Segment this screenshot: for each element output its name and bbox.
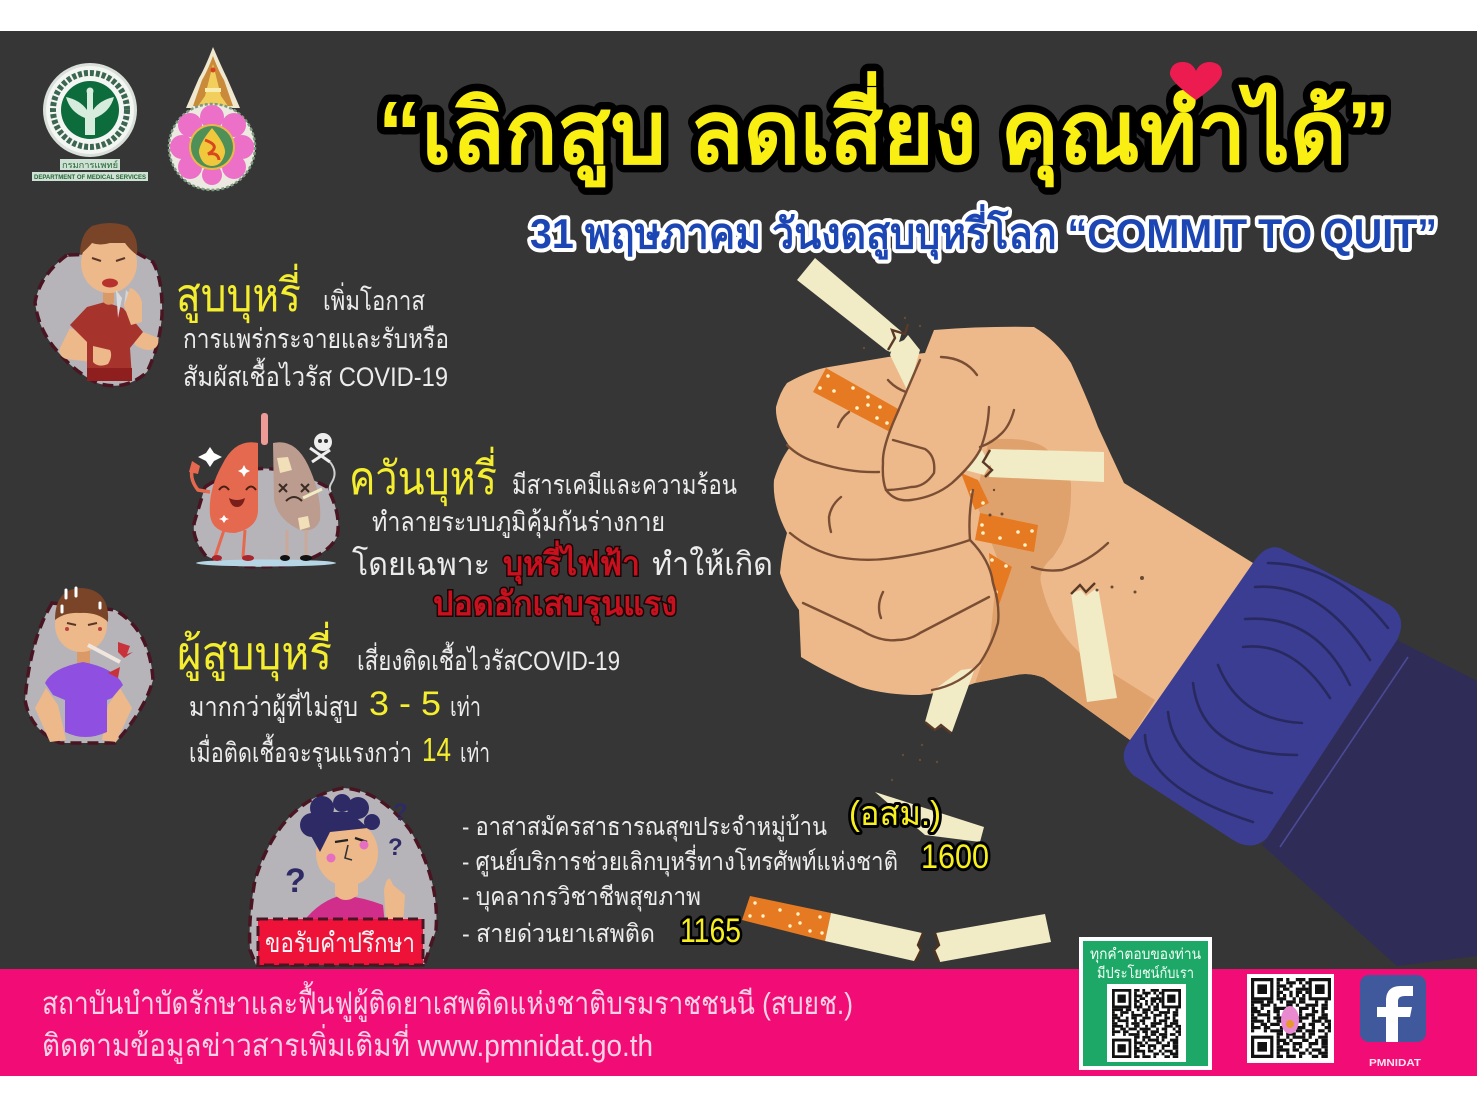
text block: smoking <box>176 263 449 392</box>
blue jacket cuff with fold lines <box>1124 547 1401 846</box>
illustration: thinking person <box>250 788 436 965</box>
text block: cigarette smoke: มีสารเคมีและความร้อน <box>512 470 737 500</box>
dark blue forearm sleeve <box>1262 640 1477 966</box>
consultation contact list: - สายด่วนยาเสพติด <box>462 920 655 948</box>
logo: Department of Medical Services: DEPARTMENT OF MEDICAL SERVICES <box>34 174 147 181</box>
text block: cigarette smoke: ปอดอักเสบรุนแรง <box>433 585 677 625</box>
tobacco crumbs <box>863 317 1144 781</box>
label: request consultation <box>258 919 423 965</box>
icon: heart <box>1170 62 1222 100</box>
text block: cigarette smoke: บุหรี่ไฟฟ้า <box>503 540 640 585</box>
illustration: thinking person: ? <box>388 834 403 861</box>
icon: Facebook <box>1360 975 1426 1069</box>
text block: smokers risk: 14 <box>422 731 451 768</box>
text block: smokers risk: มากกว่าผู้ที่ไม่สูบ <box>189 688 358 723</box>
footer band <box>0 969 1477 1076</box>
text block: smoking: เพิ่มโอกาส <box>323 282 425 316</box>
text block: smoking: สูบบุหรี่ <box>176 263 301 324</box>
survey QR card: มีประโยชน์กับเรา <box>1097 964 1194 982</box>
icon: Facebook: PMNIDAT <box>1369 1057 1422 1069</box>
survey QR card <box>1079 937 1212 1070</box>
broken cigarette pieces <box>797 258 1117 732</box>
consultation contact list: (อสม.) <box>849 795 941 833</box>
text block: smokers risk: เท่า <box>450 692 481 722</box>
consultation contact list: - อาสาสมัครสาธารณสุขประจำหมู่บ้าน <box>462 813 827 842</box>
logo: Department of Medical Services: กรมการแพทย์ <box>62 159 118 170</box>
text block: cigarette smoke: ทำลายระบบภูมิคุ้มกันร่างกาย <box>372 507 665 539</box>
text block: smokers risk <box>177 621 620 770</box>
text block: smoking: สัมผัสเชื้อไวรัส COVID-19 <box>183 357 448 392</box>
text block: smokers risk: เสี่ยงติดเชื้อไวรัสCOVID-19 <box>357 641 620 676</box>
orange filter pieces behind the thumb <box>813 368 1038 608</box>
illustration: thinking person: ? <box>393 799 408 826</box>
illustration: coughing man <box>35 223 162 386</box>
text block: smokers risk: เท่า <box>460 738 490 768</box>
jagged burnt edges <box>888 324 1095 733</box>
consultation contact list: 1600 <box>921 838 989 876</box>
text block: smokers risk: ผู้สูบบุหรี่ <box>177 621 332 682</box>
palm shadow <box>975 439 1155 740</box>
logo: Department of Medical Services <box>32 63 148 181</box>
label: request consultation: ขอรับคำปรึกษา <box>265 928 415 958</box>
text block: cigarette smoke: ควันบุหรี่ <box>349 446 497 507</box>
filter dots <box>818 374 1034 594</box>
footer text <box>42 981 853 1064</box>
illustration: fist crushing cigarettes <box>774 258 1253 781</box>
broken cigarette near hotline number <box>742 896 1051 962</box>
text block: cigarette smoke <box>349 446 773 625</box>
website QR code <box>1247 974 1334 1063</box>
text block: smokers risk: 3 - 5 <box>369 685 441 723</box>
illustration: healthy and smoker lungs <box>189 413 338 567</box>
text block: cigarette smoke: ทำให้เกิด <box>652 546 773 582</box>
survey QR card: ทุกคำตอบของท่าน <box>1090 946 1201 964</box>
subtitle: 31 พฤษภาคม วันงดสูบบุหรี่โลก “COMMIT TO QUIT” <box>530 204 1437 260</box>
illustration: thinking person: ? <box>285 862 306 900</box>
consultation contact list: - ศูนย์บริการช่วยเลิกบุหรี่ทางโทรศัพท์แห่งชาติ <box>462 844 898 877</box>
footer text: สถาบันบำบัดรักษาและฟื้นฟูผู้ติดยาเสพติดแห่งชาติบรมราชชนนี (สบยช.) <box>42 981 853 1022</box>
illustration: man with fever and thermometer <box>25 588 153 743</box>
title: “เลิกสูบ ลดเสี่ยง คุณทำได้” <box>378 71 1390 188</box>
consultation contact list: - บุคลากรวิชาชีพสุขภาพ <box>462 883 701 912</box>
hand base <box>774 327 1253 740</box>
text block: cigarette smoke: โดยเฉพาะ <box>352 546 490 582</box>
finger and thumb contour lines <box>787 357 1108 690</box>
text block: smoking: การแพร่กระจายและรับหรือ <box>183 324 449 354</box>
consultation contact list: 1165 <box>680 912 741 950</box>
footer text: ติดตามข้อมูลข่าวสารเพิ่มเติมที่ www.pmnidat.go.th <box>42 1024 653 1064</box>
text block: smokers risk: เมื่อติดเชื้อจะรุนแรงกว่า <box>189 733 412 770</box>
consultation contact list <box>462 795 989 950</box>
cigarette behind (อสม.) label <box>875 792 984 842</box>
logo: PMNIDAT lotus emblem <box>169 47 255 190</box>
